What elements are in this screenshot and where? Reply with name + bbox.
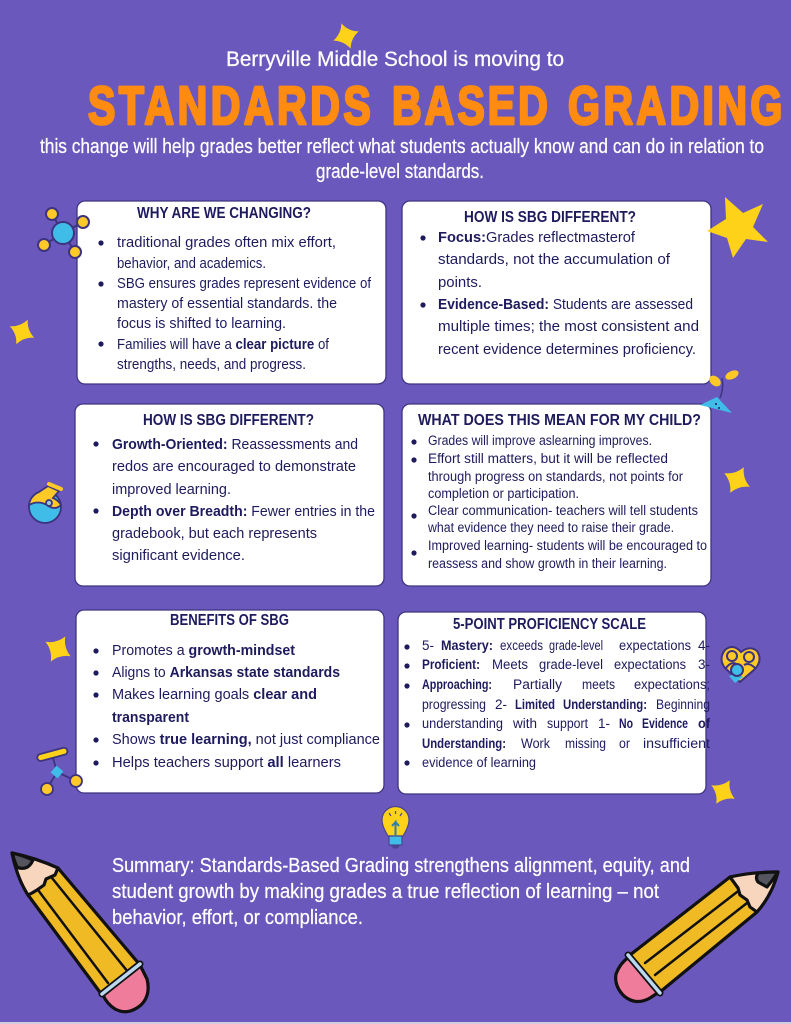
bullet list: proficiency levels: or — [619, 736, 630, 751]
bullet list: growth and depth: Growth-Oriented: Reassessments and — [112, 436, 358, 453]
subtitle — [40, 136, 764, 183]
bullet list: proficiency levels: insufficient — [643, 736, 710, 751]
subtitle: grade-level standards. — [316, 161, 484, 183]
panel: what does this mean for my child — [402, 404, 711, 586]
bullet list: child: completion or participation. — [428, 486, 579, 501]
bullet list: growth and depth: significant evidence. — [112, 547, 245, 564]
title: BASED — [392, 77, 548, 136]
summary text: Summary: Standards-Based Grading strengthens alignment, equity, and — [112, 854, 690, 877]
panel: 5-point proficiency scale — [398, 612, 710, 794]
panel: how is SBG different 2 — [75, 404, 384, 586]
bullet list: focus and evidence: Focus:Grades reflectmasterof — [438, 229, 636, 246]
bullet list: proficiency levels: Approaching: — [422, 677, 492, 692]
bullet list: growth and depth: redos are encouraged to demonstrate — [112, 458, 356, 475]
bullet list: proficiency levels: Limited — [515, 697, 555, 712]
icon: large star — [707, 197, 768, 258]
bullet list: proficiency levels: with — [512, 716, 537, 731]
bullet list: growth and depth: improved learning. — [112, 481, 231, 498]
bullet list: child — [411, 433, 707, 571]
icon: light bulb — [382, 806, 409, 848]
bullet list: proficiency levels: Work — [521, 736, 550, 751]
icon: left pencil — [12, 853, 148, 1012]
bullet list: focus and evidence: multiple times; the most consistent and — [438, 318, 699, 335]
bullet list: focus and evidence — [420, 229, 699, 358]
heading: benefits: BENEFITS OF SBG — [170, 612, 289, 629]
bullet list: proficiency levels: evidence of learning — [422, 755, 536, 770]
bullet list: proficiency levels: of — [698, 716, 710, 731]
icon: heart with people — [722, 647, 760, 683]
bullet list: proficiency levels: Evidence — [642, 716, 688, 731]
bullet list: proficiency levels: Proficient: — [422, 657, 480, 672]
summary text: behavior, effort, or compliance. — [112, 906, 363, 929]
bullet list: child: Effort still matters, but it will be reflected — [428, 451, 668, 466]
bullet list: proficiency levels: 3- — [698, 657, 710, 672]
bullet list: benefits: Aligns to Arkansas state standards — [112, 664, 340, 681]
bullet list: child: what evidence they need to raise their grade. — [427, 520, 674, 535]
panel: benefits of SBG — [76, 610, 384, 793]
bullet list: focus and evidence: recent evidence determines proficiency. — [438, 341, 696, 358]
bullet list: benefits: transparent — [112, 709, 189, 726]
summary text — [112, 854, 690, 929]
bullet list: proficiency levels: Meets — [492, 657, 528, 672]
title: GRADING — [568, 77, 782, 136]
icon: right pencil — [616, 872, 778, 1002]
bullet list: child: reassess and show growth in their learning. — [428, 556, 667, 571]
bullet list: proficiency levels: Understanding: — [563, 697, 647, 712]
icon: sparkle left — [4, 314, 40, 350]
bullet list: focus and evidence: points. — [438, 274, 482, 291]
icon: sparkle top — [329, 19, 363, 53]
bullet list: proficiency levels: expectations — [614, 657, 686, 672]
bullet list: why: traditional grades often mix effort, — [117, 234, 336, 251]
bullet list: benefits: Makes learning goals clear and — [112, 686, 317, 703]
icon: sparkle left lower — [38, 629, 78, 669]
title — [88, 77, 782, 136]
bullet list: proficiency levels: progressing — [422, 697, 486, 712]
bullet list: benefits: Promotes a growth-mindset — [112, 642, 295, 659]
bullet list: why: Families will have a clear picture of — [117, 336, 330, 353]
bullet list: why: behavior, and academics. — [117, 255, 266, 272]
bullet list: child: Clear communication- teachers will tell students — [428, 503, 698, 518]
panel: why are we changing — [77, 201, 386, 384]
bullet list: child: Improved learning- students will be encouraged to — [428, 538, 707, 553]
icon: sparkle right middle — [717, 460, 757, 500]
bullet list: proficiency levels: Mastery: — [441, 638, 493, 653]
title: STANDARDS — [88, 77, 371, 136]
bullet list: proficiency levels: grade-level — [539, 657, 603, 672]
icon: molecule bar lower left — [36, 747, 82, 795]
bullet list: proficiency levels: 2- — [495, 697, 507, 712]
heading: what does this mean: WHAT DOES THIS MEAN FOR MY CHILD? — [418, 412, 701, 429]
bullet list: why: mastery of essential standards. the — [117, 295, 337, 312]
bullet list: why: SBG ensures grades represent evidence of — [117, 275, 372, 292]
bullet list: proficiency levels: 4- — [698, 638, 710, 653]
bullet list: proficiency levels: Partially — [513, 677, 562, 692]
bullet list: benefits: Helps teachers support all learners — [112, 754, 341, 771]
bullet list: proficiency levels: understanding — [422, 716, 503, 731]
bullet list: why: strengths, needs, and progress. — [117, 356, 306, 373]
panel: how is SBG different 1 — [402, 201, 711, 384]
bullet list: growth and depth — [93, 436, 375, 564]
bullet list: proficiency levels: Beginning — [656, 697, 710, 712]
heading: how is SBG different: HOW IS SBG DIFFERENT? — [143, 412, 314, 429]
bullet list: growth and depth: gradebook, but each represents — [112, 525, 317, 542]
bullet list: why: focus is shifted to learning. — [117, 315, 286, 332]
bullet list: proficiency levels: expectations — [619, 638, 691, 653]
bullet list: why — [98, 234, 372, 373]
icon: plant flask — [700, 368, 740, 413]
bullet list: child: Grades will improve aslearning improves. — [428, 433, 652, 448]
bullet list: proficiency levels: Understanding: — [422, 736, 506, 751]
bullet list: proficiency levels: missing — [565, 736, 606, 751]
bullet list: proficiency levels: 5- — [422, 638, 434, 653]
icon: sparkle right lower — [705, 774, 741, 810]
heading: how is SBG different: HOW IS SBG DIFFERENT? — [464, 209, 636, 226]
bullet list: proficiency levels: 1- — [598, 716, 610, 731]
bullet list: growth and depth: Depth over Breadth: Fewer entries in the — [112, 503, 375, 520]
bullet list: proficiency levels: grade-level — [549, 638, 603, 653]
bullet list: proficiency levels: support — [547, 716, 588, 731]
bullet list: proficiency levels: No — [619, 716, 633, 731]
bullet list: focus and evidence: Evidence-Based: Students are assessed — [438, 296, 693, 313]
bullet list: benefits: Shows true learning, not just compliance — [112, 731, 380, 748]
bullet list: benefits — [93, 642, 380, 771]
bullet list: proficiency levels — [404, 638, 710, 770]
bullet list: proficiency levels: expectations; — [634, 677, 710, 692]
icon: molecule top left — [38, 208, 89, 258]
bullet list: proficiency levels: exceeds — [500, 638, 543, 653]
bullet list: focus and evidence: standards, not the accumulation of — [438, 251, 671, 268]
intro line: Berryville Middle School is moving to — [226, 48, 564, 71]
icon: flask — [29, 484, 61, 523]
bullet list: proficiency levels: meets — [582, 677, 615, 692]
heading: proficiency scale: 5-POINT PROFICIENCY SCALE — [453, 616, 646, 633]
bullet list: child: through progress on standards, not points for — [428, 469, 683, 484]
heading: why are we changing: WHY ARE WE CHANGING? — [137, 205, 311, 222]
summary text: student growth by making grades a true reflection of learning – not — [112, 880, 659, 903]
